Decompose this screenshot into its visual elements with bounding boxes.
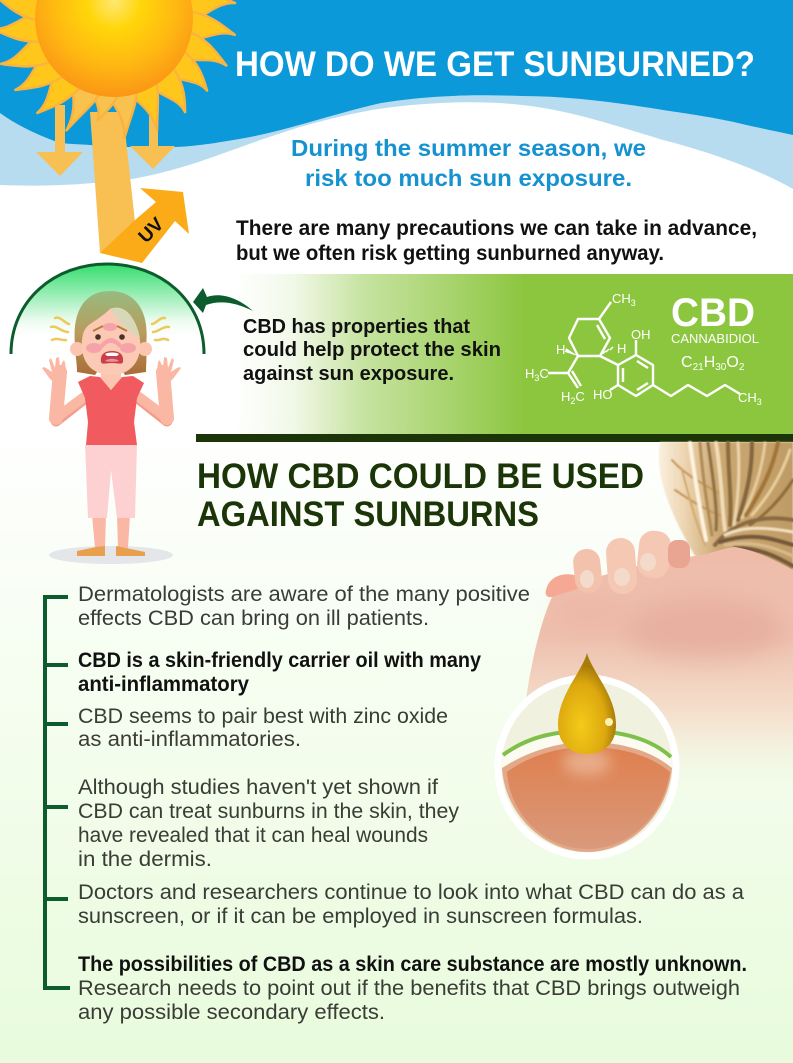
title: HOW DO WE GET SUNBURNED? — [235, 45, 755, 84]
intro text: There are many precautions we can take in advance, — [236, 217, 757, 240]
text block: studies: Although studies haven't yet shown if — [78, 776, 438, 799]
panel: CBD green band — [235, 274, 793, 434]
intro text: but we often risk getting sunburned anyway. — [236, 242, 664, 265]
bracket — [45, 597, 70, 988]
text: CBD properties — [243, 316, 501, 385]
arrow: pointing at dome — [193, 288, 253, 313]
icon: sun — [0, 0, 237, 139]
divider bar — [196, 434, 793, 442]
icon: sunburned woman — [42, 291, 181, 564]
chart: cannabidiol molecule: 3 — [534, 373, 539, 383]
chart: cannabidiol molecule: CBD — [671, 291, 755, 335]
chart: cannabidiol molecule: H — [556, 342, 565, 357]
chart: cannabidiol molecule: C — [539, 366, 549, 381]
text block: dermatologists: Dermatologists are aware of the many positive — [78, 583, 530, 606]
chart: cannabidiol molecule: OH — [631, 327, 650, 342]
chart: cannabidiol molecule: O — [726, 354, 739, 371]
chart: cannabidiol molecule: C — [681, 354, 693, 371]
heading — [197, 457, 644, 534]
chart: cannabidiol molecule: CANNABIDIOL — [671, 331, 759, 346]
subtitle — [291, 135, 646, 191]
chart: cannabidiol molecule: H — [561, 389, 570, 404]
text block: studies: in the dermis. — [78, 848, 212, 871]
text: CBD properties: against sun exposure. — [243, 363, 454, 385]
chart: cannabidiol molecule: 3 — [757, 397, 762, 407]
icon: oil drop on skin — [498, 653, 676, 856]
text block: possibilities: Research needs to point out if the benefits that CBD brings outweigh — [78, 977, 740, 1000]
text block: zinc oxide: CBD seems to pair best with zinc oxide — [78, 705, 448, 728]
text: CBD properties: could help protect the skin — [243, 339, 501, 361]
chart: cannabidiol molecule: H — [704, 354, 715, 371]
heading: HOW CBD COULD BE USED — [197, 457, 644, 496]
text block: studies: CBD can treat sunburns in the skin, they — [78, 800, 460, 823]
illustration: UV beam and down arrows — [36, 105, 175, 253]
chart: cannabidiol molecule: H — [617, 341, 626, 356]
arrow: UV: UV — [135, 214, 168, 248]
chart: cannabidiol molecule: 30 — [715, 362, 727, 373]
chart: cannabidiol molecule: H — [525, 366, 534, 381]
text block: sunscreen: sunscreen, or if it can be employed in sunscreen formulas. — [78, 905, 643, 928]
chart: cannabidiol molecule: 3 — [631, 298, 636, 308]
chart: cannabidiol molecule: HO — [593, 387, 612, 402]
photo: hair and shoulder — [521, 442, 793, 800]
subtitle: During the summer season, we — [291, 135, 646, 161]
chart: cannabidiol molecule: 2 — [739, 362, 745, 373]
text block: studies: have revealed that it can heal wounds — [78, 824, 428, 847]
text: CBD properties: CBD has properties that — [243, 316, 470, 338]
chart: cannabidiol molecule: CH — [612, 291, 631, 306]
text block: possibilities: The possibilities of CBD as a skin care substance are mostly unknown. — [78, 953, 747, 976]
chart: cannabidiol molecule: CH — [738, 390, 757, 405]
intro text — [236, 217, 757, 265]
text block: dermatologists: effects CBD can bring on ill patients. — [78, 607, 429, 630]
text block: carrier oil — [78, 649, 481, 696]
text block: studies — [78, 776, 460, 871]
chart: cannabidiol molecule — [525, 291, 762, 407]
chart: cannabidiol molecule: 21 — [693, 362, 704, 373]
text block: zinc oxide: as anti-inflammatories. — [78, 728, 301, 751]
text block: possibilities: any possible secondary effects. — [78, 1001, 385, 1024]
protective dome — [11, 264, 204, 354]
text block: carrier oil: anti-inflammatory — [78, 673, 249, 696]
chart: cannabidiol molecule: C — [575, 389, 585, 404]
header sky waves — [0, 0, 793, 189]
subtitle: risk too much sun exposure. — [305, 165, 632, 191]
text block: dermatologists — [78, 583, 530, 630]
text block: carrier oil: CBD is a skin-friendly carrier oil with many — [78, 649, 481, 672]
chart: cannabidiol molecule: 2 — [570, 396, 575, 406]
heading: AGAINST SUNBURNS — [197, 495, 539, 534]
text block: zinc oxide — [78, 705, 448, 751]
text block: sunscreen: Doctors and researchers continue to look into what CBD can do as a — [78, 881, 744, 904]
arrow: UV — [100, 188, 189, 263]
text block: sunscreen — [78, 881, 744, 928]
text block: possibilities — [78, 953, 747, 1024]
